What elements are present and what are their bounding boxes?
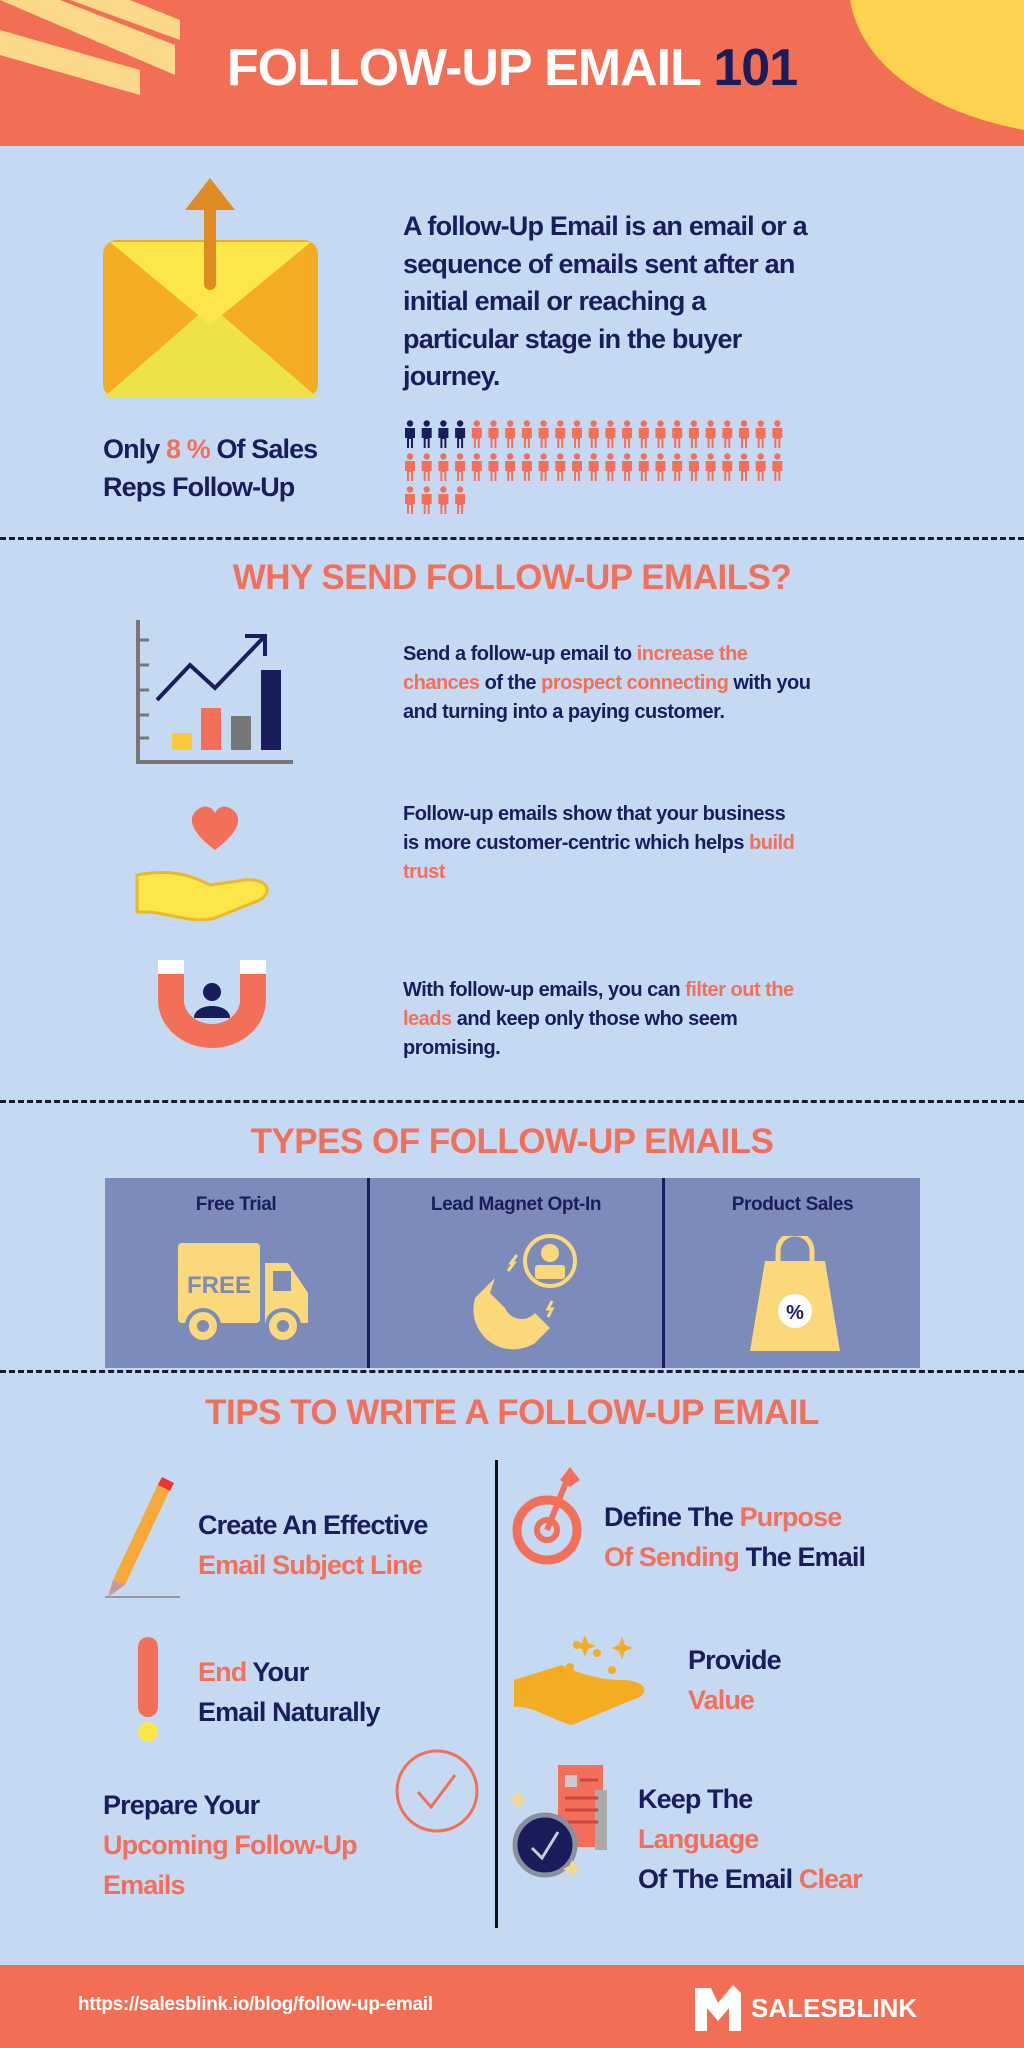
tip: end naturally: End Your xyxy=(198,1657,308,1687)
text: filter leads: promising. xyxy=(403,1037,500,1059)
footer url: https://salesblink.io/blog/follow-up-email xyxy=(78,1994,433,2015)
icon: heart on hand xyxy=(136,806,269,922)
text: build trust: trust xyxy=(403,861,445,883)
tip: subject line xyxy=(198,1510,428,1580)
footer xyxy=(0,1965,1024,2048)
definition text: A follow-Up Email is an email or a xyxy=(403,211,807,241)
tip: end naturally: Email Naturally xyxy=(198,1697,380,1727)
text: increase chances: Send a follow-up email to increase the xyxy=(403,643,747,665)
icon: pencil xyxy=(105,1477,180,1598)
type: lead magnet xyxy=(431,1194,601,1350)
panel: types of emails xyxy=(105,1178,920,1368)
tip: end naturally xyxy=(198,1657,380,1727)
definition text: initial email or reaching a xyxy=(403,286,706,316)
icon: document with check badge xyxy=(510,1765,607,1878)
tip: prepare upcoming xyxy=(103,1790,357,1900)
icon: magnet with person xyxy=(158,960,266,1048)
tip: language clear xyxy=(638,1784,862,1894)
heading: tips: TIPS TO WRITE A FOLLOW-UP EMAIL xyxy=(205,1393,819,1432)
type: lead magnet: Lead Magnet Opt-In xyxy=(431,1194,601,1215)
stat text: Only 8 % Of Sales xyxy=(103,434,317,464)
decorative stripes xyxy=(0,0,180,95)
text: filter leads xyxy=(403,979,794,1059)
tip: provide value: Value xyxy=(688,1685,754,1715)
definition text: journey. xyxy=(403,361,500,391)
text: filter leads: leads and keep only those who seem xyxy=(403,1008,737,1030)
tip: provide value xyxy=(688,1645,781,1715)
type: free trial: FREE xyxy=(187,1272,251,1299)
type: free trial xyxy=(178,1194,308,1340)
definition text: sequence of emails sent after an xyxy=(403,248,795,278)
text: increase chances: and turning into a paying customer. xyxy=(403,701,724,723)
text: filter leads: With follow-up emails, you can filter out the xyxy=(403,979,794,1001)
pictogram: people xyxy=(405,420,782,514)
icon: check circle xyxy=(396,1750,478,1832)
type: product sales xyxy=(732,1194,853,1351)
tip: purpose: Define The Purpose xyxy=(604,1502,841,1532)
text: build trust xyxy=(403,803,794,883)
type: product sales: % xyxy=(786,1302,804,1324)
yellow blob xyxy=(850,0,1024,130)
tip: provide value: Provide xyxy=(688,1645,781,1675)
tip: subject line: Create An Effective xyxy=(198,1510,428,1540)
text: build trust: Follow-up emails show that your business xyxy=(403,803,785,825)
tip: prepare upcoming: Emails xyxy=(103,1870,185,1900)
tip: language clear: Language xyxy=(638,1824,758,1854)
stat text: Reps Follow-Up xyxy=(103,472,294,502)
heading: types: TYPES OF FOLLOW-UP EMAILS xyxy=(251,1122,773,1161)
icon: exclamation xyxy=(138,1637,158,1742)
tip: purpose xyxy=(604,1502,865,1572)
icon: target with arrow xyxy=(512,1467,582,1564)
heading: why send: WHY SEND FOLLOW-UP EMAILS? xyxy=(233,558,791,597)
icon: hand with sparkles xyxy=(514,1635,644,1725)
title: FOLLOW-UP EMAIL 101 xyxy=(227,39,797,97)
header banner xyxy=(0,0,1024,146)
text: increase chances xyxy=(403,643,810,723)
tip: language clear: Of The Email Clear xyxy=(638,1864,862,1894)
text: build trust: is more customer-centric which helps build xyxy=(403,832,794,854)
tip: prepare upcoming: Upcoming Follow-Up xyxy=(103,1830,357,1860)
icon: growth chart xyxy=(136,620,293,764)
logo: salesblink: SALESBLINK xyxy=(751,1993,917,2023)
tip: language clear: Keep The xyxy=(638,1784,752,1814)
definition text xyxy=(402,211,808,391)
type: product sales: Product Sales xyxy=(732,1194,853,1215)
definition text: particular stage in the buyer xyxy=(403,324,741,354)
logo: salesblink xyxy=(695,1985,917,2031)
tip: prepare upcoming: Prepare Your xyxy=(103,1790,259,1820)
type: free trial: Free Trial xyxy=(196,1194,276,1215)
icon: envelope with arrow xyxy=(103,178,318,398)
tip: subject line: Email Subject Line xyxy=(198,1550,422,1580)
stat text xyxy=(103,434,317,502)
tip: purpose: Of Sending The Email xyxy=(604,1542,865,1572)
text: increase chances: chances of the prospect connecting with you xyxy=(403,672,810,694)
